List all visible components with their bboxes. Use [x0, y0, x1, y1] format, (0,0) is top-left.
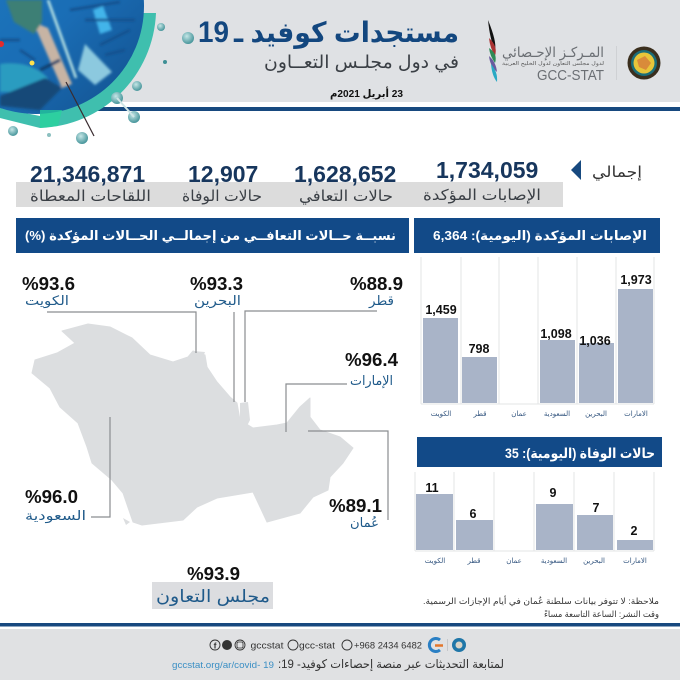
- footer link line: gccstat.org/ar/covid- 19: [172, 660, 274, 671]
- total label with arrow: إجمالي: [592, 164, 642, 182]
- label: Bahrain: البحرين: [194, 293, 241, 309]
- panel heading: recovery rate: [16, 218, 409, 253]
- footer link line: [172, 657, 504, 672]
- bar chart: daily deaths: البحرين: [583, 558, 605, 565]
- panel heading: daily deaths: حالات الوفاة (اليومية): 35: [505, 445, 655, 462]
- title: مستجدات كوفيد ـ: [233, 17, 459, 49]
- leader lines: [47, 311, 388, 520]
- logo: GCC-STAT: لدول مجلس التعاون لدول الخليج العربية: [502, 61, 605, 67]
- panel heading: daily confirmed: الإصابات المؤكدة (اليومية): 6,364: [433, 228, 647, 243]
- stat: deaths: 12,907: [188, 161, 258, 187]
- header band: [0, 0, 680, 111]
- label: UAE: %96.4: [345, 349, 399, 370]
- label: Saudi Arabia: [25, 486, 86, 524]
- bar chart: daily deaths: الامارات: [623, 558, 647, 565]
- bar chart: daily confirmed: 1,973: [620, 273, 652, 287]
- label: Kuwait: [22, 273, 75, 309]
- footer social row: +968 2434 6482: [354, 640, 422, 652]
- bar chart: daily deaths: عمان: [506, 558, 522, 565]
- panel heading: daily deaths: [417, 437, 662, 467]
- panel heading: daily confirmed: [414, 218, 660, 253]
- label: GCC total: [152, 563, 273, 609]
- bar chart: daily confirmed: 1,459: [425, 303, 457, 317]
- label: Bahrain: [190, 273, 243, 309]
- bar chart: daily confirmed: عمان: [511, 411, 527, 418]
- footer social row: gcc-stat: [299, 640, 335, 652]
- logo: GCC-STAT: المـركـز الإحـصائي: [502, 44, 604, 61]
- stat: recoveries: [294, 161, 396, 206]
- date: 23 أبريل 2021م: [330, 86, 403, 100]
- footer band: [0, 623, 680, 680]
- decorative virus and circuit image: [0, 0, 194, 144]
- note: وقت النشر: الساعة التاسعة مساءً: [544, 609, 659, 619]
- bar chart: daily confirmed: الكويت: [431, 410, 451, 418]
- label: Oman: [329, 495, 382, 530]
- footer social row: f: [214, 640, 217, 650]
- footer link line: لمتابعة التحديثات عبر منصة إحصاءات كوفيد- 19:: [278, 657, 504, 672]
- label: Oman: عُمان: [350, 515, 379, 530]
- label: Kuwait: الكويت: [25, 293, 69, 309]
- stat: recoveries: حالات التعافي: [299, 188, 393, 206]
- label: UAE: [345, 349, 399, 389]
- label: Kuwait: %93.6: [22, 273, 75, 294]
- bar chart: daily confirmed: 1,098: [540, 327, 572, 341]
- icon: GCC emblem: [628, 46, 660, 80]
- stat: vaccines: 21,346,871: [30, 161, 145, 187]
- stat: deaths: [182, 161, 262, 205]
- stat: recoveries: 1,628,652: [294, 161, 396, 187]
- bar chart: daily deaths: 2: [631, 524, 638, 538]
- title: 19: [198, 16, 229, 49]
- bar chart: daily deaths: الكويت: [425, 557, 445, 565]
- bar chart: daily deaths: السعودية: [541, 558, 567, 565]
- stat: vaccines: [30, 161, 151, 205]
- bar chart: daily confirmed: الامارات: [624, 411, 648, 418]
- footer social row: [210, 638, 466, 652]
- label: Bahrain: %93.3: [190, 273, 243, 294]
- logo: GCC-STAT: GCC-STAT: [537, 67, 604, 84]
- stat: confirmed: 1,734,059: [436, 157, 538, 183]
- label: Qatar: [350, 273, 403, 309]
- bar chart: daily deaths: 7: [593, 501, 600, 515]
- bar chart: daily confirmed: السعودية: [544, 411, 570, 418]
- footer social row: gccstat: [250, 640, 284, 652]
- subtitle: في دول مجلـس التعــاون: [264, 52, 459, 73]
- label: UAE: الإمارات: [350, 373, 393, 389]
- stat: deaths: حالات الوفاة: [182, 188, 262, 205]
- logo: GCC-STAT: [488, 20, 617, 84]
- panel heading: recovery rate: نسبــة حــالات التعافــي من إجمالــي الحــالات المؤكدة (%): [25, 228, 396, 243]
- bar chart: daily confirmed: قطر: [473, 411, 486, 418]
- bar chart: daily deaths: 9: [550, 486, 557, 500]
- note: ملاحظة: لا تتوفر بيانات سلطنة عُمان في أيام الإجازات الرسمية.: [423, 595, 659, 607]
- bar chart: daily deaths: [415, 472, 654, 565]
- label: GCC total: مجلس التعاون: [156, 587, 270, 606]
- stat: confirmed: [423, 157, 541, 204]
- stats band: [16, 182, 563, 207]
- stat: vaccines: اللقاحات المعطاة: [30, 188, 151, 205]
- bar chart: daily confirmed: البحرين: [585, 411, 607, 418]
- label: GCC total: %93.9: [187, 563, 240, 584]
- total label with arrow: [571, 160, 642, 182]
- bar chart: daily confirmed: [421, 257, 654, 418]
- note: [423, 595, 659, 619]
- bar chart: daily deaths: 11: [425, 481, 439, 495]
- label: Saudi Arabia: السعودية: [25, 508, 86, 524]
- map: GCC countries: [32, 324, 353, 525]
- bar chart: daily deaths: قطر: [467, 558, 480, 565]
- bar chart: daily confirmed: 1,036: [579, 334, 611, 348]
- label: Saudi Arabia: %96.0: [25, 486, 78, 507]
- bar chart: daily deaths: 6: [470, 507, 477, 521]
- stat: confirmed: الإصابات المؤكدة: [423, 187, 541, 204]
- label: Oman: %89.1: [329, 495, 382, 516]
- label: Qatar: قطر: [368, 293, 394, 309]
- label: Qatar: %88.9: [350, 273, 403, 294]
- bar chart: daily confirmed: 798: [469, 342, 489, 356]
